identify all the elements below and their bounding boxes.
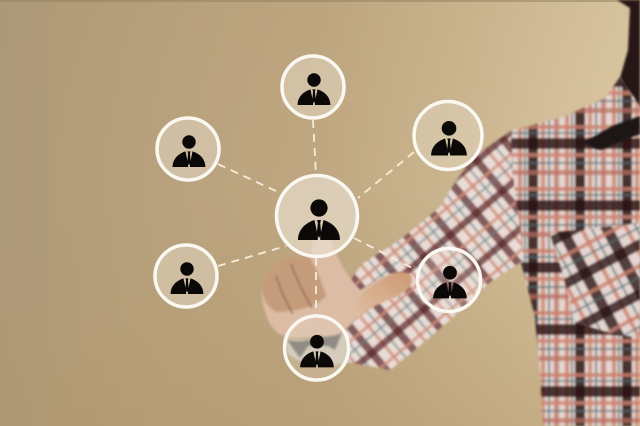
- man: shirt torso: [500, 77, 640, 426]
- node: bottom person: [284, 316, 348, 380]
- palm and back of hand: [261, 240, 412, 338]
- dashed connector lines: [218, 120, 420, 316]
- shirt collar shadow: [583, 116, 640, 150]
- shirt sleeve: [345, 131, 524, 370]
- node: left person: [155, 245, 217, 307]
- node: right person: [418, 248, 480, 312]
- node: upper left person: [157, 118, 219, 180]
- hand: [261, 240, 412, 338]
- man: neck: [617, 0, 640, 110]
- grey cuff fold seen through circle: [287, 333, 342, 358]
- thumb: [352, 272, 412, 320]
- shirt pocket flap: [550, 223, 640, 338]
- node: central person: [276, 176, 358, 256]
- curled fingers: [262, 257, 326, 312]
- node: top person: [282, 56, 344, 118]
- node: upper right person: [414, 102, 482, 170]
- shirt cuff under hand: [284, 332, 350, 366]
